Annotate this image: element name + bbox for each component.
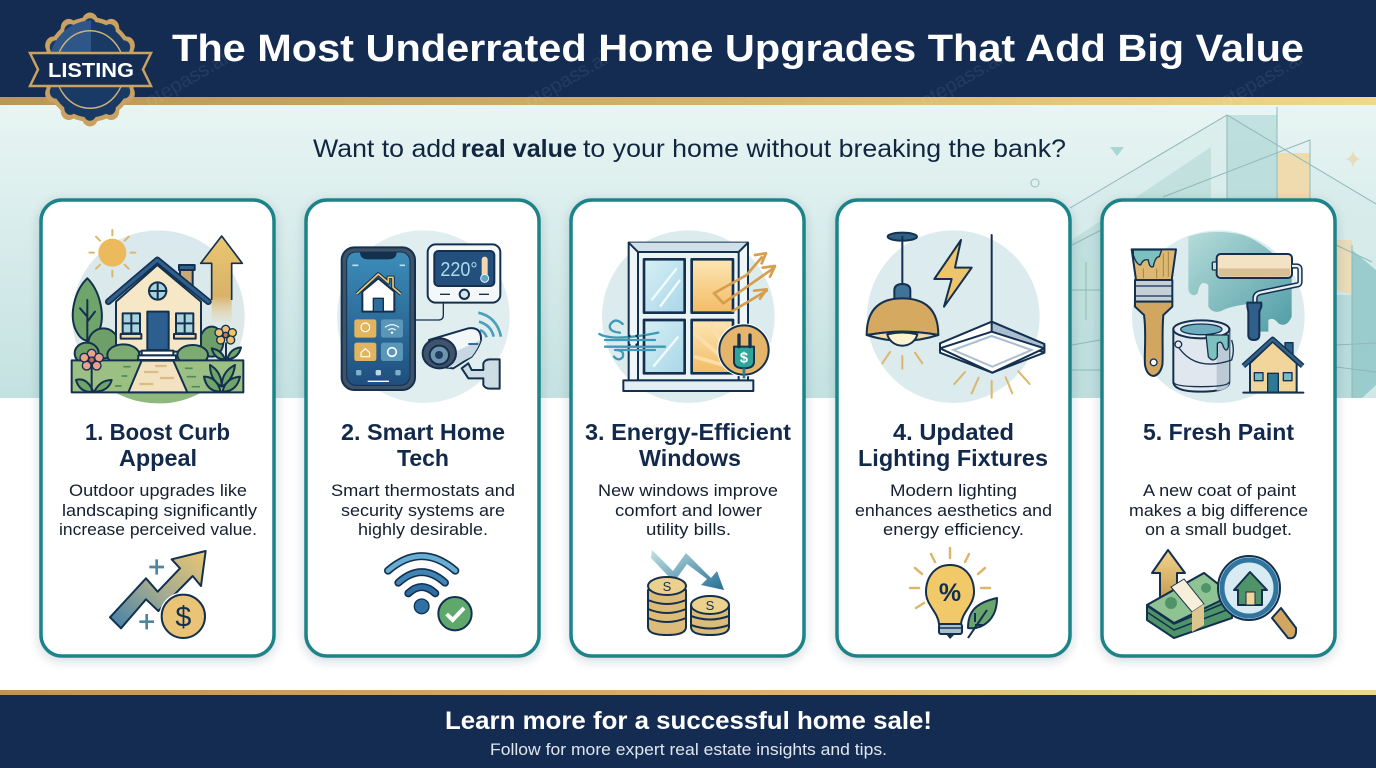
badge: listing (30, 13, 151, 127)
description: increase perceived value. (59, 521, 257, 539)
watermark: otepass.ai (522, 48, 611, 112)
icon: growth arrow with dollar coin (110, 551, 207, 640)
icon: percent light bulb with leaf: % (939, 579, 961, 607)
intro question: Want to add (313, 135, 456, 163)
intro question (313, 135, 1066, 163)
description: utility bills. (646, 521, 731, 539)
icon: wifi with check mark (388, 556, 472, 630)
intro question: real value (461, 135, 577, 163)
description: A new coat of paint (1143, 482, 1296, 500)
description (59, 482, 258, 539)
description: New windows improve (598, 482, 778, 500)
description (331, 482, 515, 539)
heading (585, 419, 791, 471)
watermark (142, 48, 1306, 112)
panel: 2 smart home tech (306, 200, 539, 656)
illustration: pendant and panel lights (867, 230, 1044, 403)
description: enhances aesthetics and (855, 502, 1052, 520)
heading: Tech (397, 445, 449, 471)
badge: listing: LISTING (48, 60, 134, 82)
icon: coin stacks with falling arrow: S (663, 579, 672, 594)
watermark: otepass.ai (916, 48, 1006, 112)
icon: growth arrow with dollar coin: $ (175, 601, 191, 633)
illustration: brush, roller, paint can and house (1132, 230, 1305, 403)
heading: 3. Energy-Efficient (585, 419, 791, 445)
footer subtext: Follow for more expert real estate insights and tips. (490, 741, 887, 759)
header bar (0, 0, 1376, 105)
icon: money stack with magnifier (1147, 550, 1296, 638)
background house outline (1031, 107, 1376, 398)
footer heading: Learn more for a successful home sale! (445, 707, 932, 735)
heading: 2. Smart Home (341, 419, 505, 445)
heading: Appeal (119, 445, 197, 471)
panel: 3 energy-efficient windows (571, 200, 804, 656)
description: comfort and lower (615, 502, 763, 520)
illustration: phone, thermostat and camera (337, 230, 510, 403)
icon: percent light bulb with leaf (910, 548, 997, 639)
illustration: window with air and sun (599, 230, 775, 403)
panel: 5 fresh paint (1102, 200, 1335, 656)
description: Modern lighting (890, 482, 1017, 500)
illustration: window with air and sun: $ (740, 350, 748, 366)
watermark: otepass.ai (142, 48, 231, 112)
background panel (0, 105, 1376, 690)
illustration: house with rising arrow (72, 230, 245, 403)
footer bar (0, 690, 1376, 768)
illustration: phone, thermostat and camera: 220° (440, 259, 478, 281)
description: security systems are (341, 502, 505, 520)
heading: 4. Updated (893, 419, 1014, 445)
heading (85, 419, 230, 471)
description: Smart thermostats and (331, 482, 515, 500)
description (1129, 482, 1308, 539)
icon: coin stacks with falling arrow: S (706, 598, 715, 613)
panel: 1 boost curb appeal (41, 200, 274, 656)
description: makes a big difference (1129, 502, 1308, 520)
description: highly desirable. (358, 521, 488, 539)
description (598, 482, 778, 539)
description: energy efficiency. (883, 521, 1024, 539)
heading: Windows (639, 445, 741, 471)
description: on a small budget. (1145, 521, 1292, 539)
camera body (429, 328, 481, 368)
description: Outdoor upgrades like (69, 482, 247, 500)
heading: 1. Boost Curb (85, 419, 230, 445)
icon: coin stacks with falling arrow (648, 550, 729, 635)
description: landscaping significantly (62, 502, 258, 520)
watermark: otepass.ai (1216, 48, 1306, 112)
title: The Most Underrated Home Upgrades That Add Big Value (172, 28, 1304, 70)
camera mount (462, 359, 500, 389)
heading (341, 419, 505, 471)
heading: 5. Fresh Paint (1143, 419, 1294, 445)
heading (858, 419, 1048, 471)
heading: Lighting Fixtures (858, 445, 1048, 471)
panel: 4 updated lighting fixtures (837, 200, 1070, 656)
description (855, 482, 1052, 539)
intro question: to your home without breaking the bank? (583, 135, 1066, 163)
